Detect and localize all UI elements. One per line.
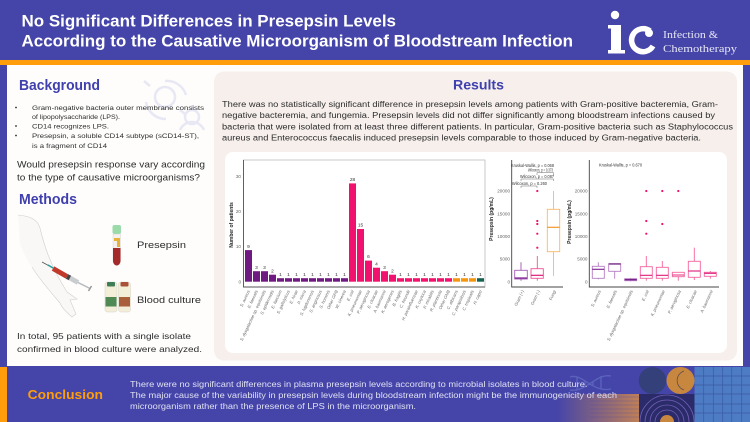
statistics brackets: Kruskal-Wallis, p = 0.068 (511, 163, 555, 168)
statistics brackets: Wilcoxon, p = 0.260 (512, 181, 548, 186)
text block: patients analysed: In total, 95 patients with a single isolate (17, 332, 192, 341)
x axis species labels: E. coli (641, 288, 650, 302)
text block: conclusion: microorganism rather than the presence of LPS in the microorganism. (130, 401, 416, 411)
x axis group labels: Gram (+) (513, 289, 525, 307)
heading: Background: Background (19, 77, 100, 94)
y axis ticks (497, 189, 510, 284)
x axis isolate labels: H. parainfluenzae (401, 289, 419, 321)
text block: background bullets: is a fragment of CD14 (32, 143, 107, 150)
y axis ticks: 20 (236, 209, 241, 214)
x axis species labels: A. baumannii (699, 288, 714, 314)
text block: results summary: bacteria that were isolated from at least three different patients. In particular, Gram-positive bacteria such as Staphylococcus (222, 122, 733, 132)
x axis species labels: E. cloacae (685, 289, 698, 309)
x axis isolate labels: E. coli (346, 288, 355, 302)
y axis ticks: 0 (507, 279, 510, 284)
x axis isolate labels: C. freundii (398, 288, 411, 309)
statistic: Kruskal-Wallis, p = 0.670 (599, 162, 643, 168)
bar value labels: 1 (327, 272, 330, 278)
heading: Results: Results (453, 78, 504, 92)
bar value labels: 1 (295, 272, 298, 278)
text block: background bullets: Presepsin, a soluble CD14 subtype (sCD14-ST), (32, 133, 199, 140)
bar value labels: 6 (367, 254, 370, 260)
title (22, 12, 573, 50)
y axis ticks: 0 (585, 279, 588, 284)
text block: background bullets: Gram-negative bacteria outer membrane consists (32, 105, 205, 112)
y axis ticks: 20000 (497, 189, 510, 194)
text block: results summary: aureus and Enterococcus faecalis induced presepsin levels comparable to those induced by Gram-negative bacteria. (222, 134, 701, 142)
bar value labels: 1 (343, 272, 346, 278)
x axis isolate labels: K. oxytoca (414, 289, 427, 309)
pink species boxes (640, 248, 716, 281)
bar value labels: 4 (375, 262, 378, 268)
x axis species labels: S. aureus (590, 289, 602, 308)
text block: research question (17, 160, 205, 182)
gram-positive bars (245, 250, 348, 282)
bar value labels: 2 (271, 268, 274, 274)
x axis species labels: E. faecalis (605, 288, 618, 309)
x axis isolate labels: C. albicans (446, 288, 459, 310)
gram-negative bars (349, 183, 452, 282)
bar value labels: 15 (358, 222, 363, 228)
bar value labels: 1 (431, 272, 434, 278)
purple species boxes (592, 262, 637, 281)
x axis isolate labels: R. planticola (429, 289, 443, 312)
bar value labels: 1 (455, 272, 458, 278)
x axis isolate labels: P. micra (296, 289, 307, 305)
y axis ticks: 15000 (497, 211, 510, 216)
x axis isolate labels: C. tropicalis (461, 288, 475, 311)
bar value labels: 9 (247, 244, 250, 250)
x axis isolate labels: S. aureus (239, 289, 251, 308)
y axis ticks: 30 (236, 174, 241, 179)
x axis isolate labels: S. anginosus (308, 288, 323, 313)
x axis isolate labels: S. epidermidis (259, 289, 275, 315)
other bar (477, 278, 484, 282)
text block: results summary: negative bacteremia, and fungemia. Presepsin levels did not differ significantly among bloodstream infections caused by (222, 111, 715, 120)
y axis title: Number of patients (229, 202, 235, 248)
y axis title: Presepsin (pg/mL) (567, 200, 573, 244)
bar value labels: 1 (279, 272, 282, 278)
text block: background bullets: of lipopolysaccharide (LPS). (32, 114, 120, 121)
decoration: gradient, circles and grid (557, 367, 750, 422)
y axis ticks: 20000 (575, 189, 588, 194)
logo: Infection and Chemotherapy: Infection & (663, 30, 718, 41)
x axis isolate labels: W. cinerea (334, 289, 347, 309)
x axis isolate labels: H. capsi (472, 288, 483, 305)
text block: conclusion: The major cause of the variability in presepsin levels during bloodstream infection might be the immunogenicity of each (130, 390, 617, 400)
x axis isolate labels: S. hominis (318, 289, 331, 309)
y axis ticks (236, 174, 241, 284)
x axis isolate labels: B. fragilis (391, 289, 403, 307)
x axis isolate labels: E. faecium (270, 289, 283, 309)
box: Fungi (547, 191, 560, 276)
header band (0, 0, 750, 65)
title: According to the Causative Microorganism of Bloodstream Infection (22, 32, 573, 50)
x axis group labels (513, 289, 557, 307)
x axis isolate labels (239, 288, 483, 342)
text block: patients analysed: confirmed in blood culture were analyzed. (17, 345, 202, 354)
box: Gram negative (531, 190, 543, 281)
text block: conclusion: There were no significant differences in plasma presepsin levels according to microbial isolates in blood culture. (130, 379, 588, 389)
x axis isolate labels: P. mirabilis (422, 288, 435, 309)
x axis species labels: P. aeruginosa (667, 289, 682, 314)
bar value labels: 1 (303, 272, 306, 278)
label: Presepsin: Presepsin (137, 240, 186, 250)
statistics brackets: Wilcoxon, p = 0.087 (520, 174, 555, 179)
x axis isolate labels: Other GNB (438, 289, 451, 310)
y axis title: Presepsin (pg/mL) (489, 197, 495, 241)
box plot: presepsin by species (567, 160, 719, 342)
bar value labels: 1 (447, 272, 450, 278)
y axis ticks (575, 189, 588, 284)
x axis isolate labels: C. parapsilosis (451, 288, 467, 316)
bar value labels: 28 (350, 177, 355, 183)
bar value labels: 3 (255, 265, 258, 271)
text block: conclusion (130, 379, 617, 411)
x axis species labels (590, 288, 714, 342)
panel: conclusion (0, 366, 750, 422)
text block: research question: Would presepsin response vary according (17, 160, 205, 170)
icon: arm with syringe (18, 215, 92, 317)
text block: background bullets (15, 105, 205, 150)
x axis isolate labels: P. aeruginosa (356, 289, 371, 314)
panel: results (214, 72, 737, 360)
bar value labels: 1 (439, 272, 442, 278)
icon: blood culture bottles (105, 282, 130, 312)
bar value labels (247, 177, 482, 278)
bar value labels: 1 (335, 272, 338, 278)
x axis group labels: Fungi (548, 289, 557, 301)
bar value labels: 1 (287, 272, 290, 278)
y axis ticks: 5000 (577, 257, 588, 262)
heading: Conclusion: Conclusion (28, 387, 103, 402)
bar value labels: 1 (319, 272, 322, 278)
box: Gram positive (515, 262, 527, 281)
x axis isolate labels: E. hirae (288, 289, 299, 305)
bar value labels: 1 (311, 272, 314, 278)
title: No Significant Differences in Presepsin Levels (22, 12, 396, 30)
fungal bars (453, 278, 476, 282)
bar value labels: 1 (423, 272, 426, 278)
heading: Methods: Methods (19, 191, 77, 208)
bar value labels: 3 (383, 265, 386, 271)
x axis group labels: Gram (-) (530, 289, 541, 306)
statistics brackets: Wilcoxon, p = 0.373 (528, 168, 553, 172)
bar value labels: 1 (471, 272, 474, 278)
bar value labels: 1 (415, 272, 418, 278)
x axis isolate labels: K. aerogenes (380, 288, 395, 314)
panel: main content (7, 65, 743, 366)
label: Blood culture: Blood culture (137, 295, 201, 305)
y axis ticks: 10000 (575, 234, 588, 239)
x axis isolate labels: K. pneumoniae (346, 289, 363, 317)
text block: patients analysed (17, 332, 202, 354)
x axis isolate labels: S. dysgalactiae sp. equisimilis (239, 289, 267, 342)
x axis isolate labels: A. baumannii (372, 288, 387, 314)
text block: background bullets: CD14 recognizes LPS. (32, 124, 109, 130)
outliers (645, 190, 679, 235)
bar chart: number of patients by isolate (229, 160, 485, 342)
y axis ticks: 5000 (500, 257, 510, 262)
icon: presepsin tube (112, 225, 121, 266)
icon: faint bacteria watermark (144, 81, 204, 130)
text block: research question: to the type of causative microorganisms? (17, 172, 200, 182)
bar value labels: 1 (399, 272, 402, 278)
box plot: presepsin by organism group (489, 160, 563, 307)
bar value labels: 3 (263, 265, 266, 271)
y axis ticks: 10000 (497, 234, 510, 239)
x axis isolate labels: E. faecalis (246, 288, 259, 309)
y axis ticks: 0 (238, 279, 241, 284)
y axis ticks: 10 (236, 244, 241, 249)
y axis ticks: 15000 (575, 211, 588, 216)
bar value labels: 1 (463, 272, 466, 278)
x axis isolate labels: E. cloacae (366, 289, 379, 309)
x axis species labels: S. dysgalactiae sp. equisimilis (606, 289, 634, 342)
x axis species labels: K. pneumoniae (649, 289, 666, 317)
statistics brackets (511, 163, 555, 188)
bar value labels: 1 (479, 272, 482, 278)
text block: results summary (222, 100, 733, 142)
x axis isolate labels: Other GPB (326, 289, 339, 310)
logo: Infection and Chemotherapy (608, 11, 737, 55)
bar value labels: 1 (407, 272, 410, 278)
logo: Infection and Chemotherapy: Chemotherapy (663, 44, 737, 55)
text block: results summary: There was no statistically significant difference in presepsin levels among patients with Gram-positive bacteremia, Gram- (222, 100, 718, 109)
x axis isolate labels: S. lugdunensis (299, 289, 315, 316)
x axis isolate labels: S. gallolyticus (276, 288, 291, 315)
bar value labels: 2 (391, 268, 394, 274)
